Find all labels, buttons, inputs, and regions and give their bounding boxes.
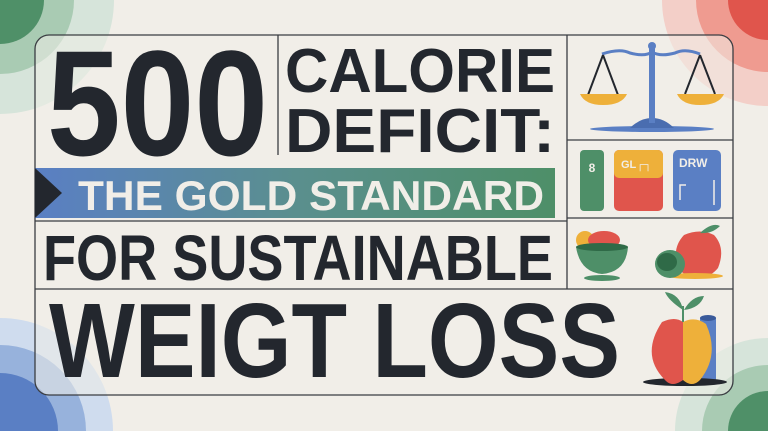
icon: food labels: GL┌┐ <box>621 159 652 172</box>
banner: the gold standard: THE GOLD STANDARD <box>78 172 544 219</box>
subtitle: for sustainable: FOR SUSTAINABLE <box>43 222 553 294</box>
decoration: bottom-right green circles <box>675 338 768 431</box>
title: CALORIE DEFICIT: CALORIE <box>285 37 555 106</box>
title: CALORIE DEFICIT <box>285 37 555 166</box>
icon: balance scale <box>580 42 724 132</box>
icon: salad bowl and apple <box>576 225 723 281</box>
decoration: top-right red circles <box>662 0 768 106</box>
icon: food labels: DRW <box>679 156 708 170</box>
icon: apple and glass <box>643 292 727 386</box>
title: CALORIE DEFICIT: DEFICIT: <box>285 97 555 166</box>
title number: 500: 500 <box>47 19 268 187</box>
icon: food labels <box>580 150 721 211</box>
decoration: top-left green circles <box>0 0 114 114</box>
icon: food labels: 8 <box>589 161 596 175</box>
headline: weigt loss: WEIGT LOSS <box>49 282 620 400</box>
frame <box>35 35 733 395</box>
decoration: bottom-left blue circles <box>0 318 113 431</box>
